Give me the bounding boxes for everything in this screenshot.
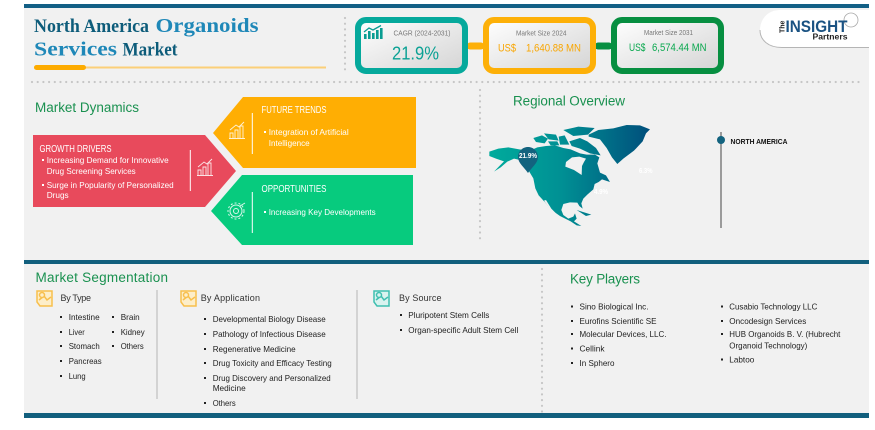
hudson bay bbox=[565, 157, 586, 175]
list: key players column 1: Eurofins Scientific SE bbox=[580, 316, 657, 326]
list: key players column 1: Cellink bbox=[580, 344, 605, 354]
title bbox=[34, 15, 259, 60]
segment: by application: Pathology of Infectious Disease bbox=[213, 329, 326, 339]
segment: by type: Others bbox=[121, 341, 144, 351]
map pin bbox=[518, 147, 538, 173]
segment: by source: By Source bbox=[399, 293, 442, 303]
segment: by application: Regenerative Medicine bbox=[213, 344, 296, 354]
panel: opportunities: OPPORTUNITIES bbox=[262, 184, 327, 195]
logo bbox=[760, 10, 869, 48]
card: market size 2031: Market Size 2031 bbox=[644, 28, 693, 37]
segment: by type: By Type bbox=[60, 293, 91, 303]
connector: CAGR to 2024 bbox=[467, 42, 484, 50]
title: Organoids bbox=[156, 15, 259, 37]
map: north america: 21.9% bbox=[519, 153, 538, 160]
title underline bbox=[34, 65, 326, 70]
title: Services bbox=[34, 38, 117, 60]
map: north america: 4.9% bbox=[594, 189, 609, 196]
map: north america bbox=[489, 125, 653, 226]
card: CAGR: CAGR (2024-2031) bbox=[394, 28, 451, 38]
panel: growth drivers: Drugs bbox=[47, 190, 69, 200]
card: market size 2031 bbox=[614, 20, 721, 71]
segment: by source: Organ-specific Adult Stem Cell bbox=[408, 325, 518, 335]
panel: future trends bbox=[213, 97, 416, 168]
card: market size 2031: 6,574.44 MN bbox=[652, 42, 707, 54]
panel: growth drivers bbox=[33, 135, 236, 207]
list: key players column 1: In Sphero bbox=[580, 358, 615, 368]
icon: document chart bbox=[37, 291, 52, 306]
list: key players column 1: Sino Biological Inc. bbox=[580, 302, 648, 312]
segment: by application: Drug Discovery and Personalized bbox=[213, 373, 331, 383]
panel: growth drivers: Increasing Demand for Innovative bbox=[47, 155, 169, 165]
connector: 2024 to 2031 bbox=[595, 42, 612, 50]
panel: opportunities: Increasing Key Developments bbox=[269, 207, 376, 217]
card: market size 2031: US$ bbox=[629, 42, 646, 54]
list: key players column 1 bbox=[571, 302, 666, 368]
card: CAGR: 21.9% bbox=[392, 44, 439, 64]
segment: by type: Liver bbox=[69, 327, 85, 337]
list: key players column 2 bbox=[721, 302, 841, 364]
segment: by type: Intestine bbox=[69, 312, 100, 322]
icon: growth chart bbox=[364, 26, 383, 39]
panel: future trends: Integration of Artificial bbox=[269, 127, 349, 137]
logo: Partners bbox=[812, 32, 848, 42]
list: key players column 2: Labtoo bbox=[729, 354, 755, 364]
list: key players column 2: Cusabio Technology LLC bbox=[729, 302, 817, 312]
segment: by application: By Application bbox=[201, 293, 260, 303]
legend: north america bbox=[717, 132, 788, 228]
icon: gear bbox=[228, 203, 245, 219]
panel: growth drivers: Surge in Popularity of Personalized bbox=[47, 180, 174, 190]
panel: growth drivers: GROWTH DRIVERS bbox=[40, 144, 112, 155]
list: key players column 2: HUB Organoids B. V. (Hubrecht bbox=[729, 329, 841, 339]
title: North America bbox=[34, 16, 149, 37]
segment: by application: Drug Toxicity and Efficacy Testing bbox=[213, 358, 332, 368]
segment: by source bbox=[374, 291, 518, 335]
map: north america: 6.3% bbox=[639, 168, 653, 175]
card: market size 2024: 1,640.88 MN bbox=[526, 42, 581, 54]
icon: document chart bbox=[181, 291, 196, 306]
list: key players column 2: Organoid Technology) bbox=[729, 340, 807, 350]
card: market size 2024: Market Size 2024 bbox=[516, 28, 566, 38]
title: Market bbox=[122, 40, 178, 60]
panel: future trends: Intelligence bbox=[269, 138, 310, 148]
segment: by type bbox=[37, 291, 145, 381]
heading: market dynamics: Market Dynamics bbox=[35, 100, 139, 115]
heading: market segmentation: Market Segmentation bbox=[36, 270, 168, 285]
list: key players column 1: Molecular Devices, LLC. bbox=[580, 329, 666, 339]
icon: document chart bbox=[374, 291, 389, 306]
card: CAGR bbox=[358, 20, 465, 71]
segment: by type: Pancreas bbox=[69, 356, 102, 366]
card: market size 2024: US$ bbox=[498, 42, 516, 54]
panel: opportunities bbox=[211, 175, 413, 245]
heading: key players: Key Players bbox=[570, 272, 640, 286]
panel: future trends: FUTURE TRENDS bbox=[262, 105, 327, 116]
segment: by type: Lung bbox=[69, 371, 86, 381]
logo: INSIGHT bbox=[786, 17, 848, 36]
segment: by application: Developmental Biology Disease bbox=[213, 314, 326, 324]
legend: north america: NORTH AMERICA bbox=[730, 137, 788, 146]
list: key players column 2: Oncodesign Services bbox=[729, 316, 806, 326]
card: market size 2024 bbox=[486, 20, 593, 71]
logo: The bbox=[780, 20, 786, 33]
icon: growth chart bbox=[197, 159, 213, 176]
segment: by application: Medicine bbox=[213, 383, 246, 393]
heading: regional overview: Regional Overview bbox=[513, 94, 625, 108]
segment: by type: Stomach bbox=[69, 341, 100, 351]
segment: by type: Brain bbox=[121, 312, 140, 322]
panel: growth drivers: Drug Screening Services bbox=[47, 166, 136, 176]
segment: by application: Others bbox=[213, 398, 236, 408]
segment: by application bbox=[181, 291, 332, 408]
segment: by source: Pluripotent Stem Cells bbox=[408, 310, 489, 320]
icon: trend chart bbox=[229, 122, 245, 138]
segment: by type: Kidney bbox=[121, 327, 145, 337]
